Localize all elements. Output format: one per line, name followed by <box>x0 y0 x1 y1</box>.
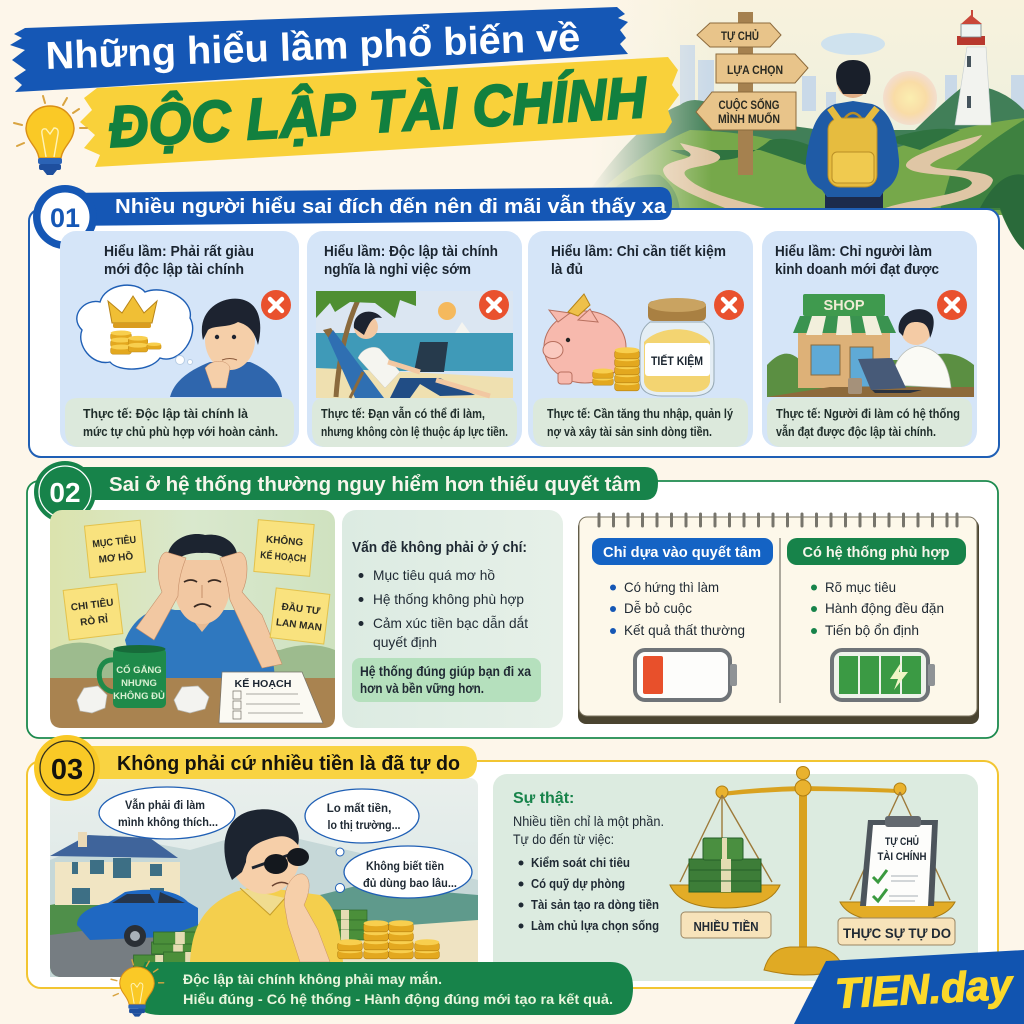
truth panel: Sự thật: <box>513 790 574 807</box>
card 3: Hiểu lầm: Chỉ cần tiết kiệm <box>551 244 726 260</box>
label: thuc su tu do <box>838 918 955 945</box>
problem text panel: Vấn đề không phải ở ý chí: <box>352 540 527 556</box>
truth panel: Có quỹ dự phòng <box>531 877 625 891</box>
title <box>10 7 679 167</box>
left pan with money <box>670 838 780 908</box>
truth panel: Làm chủ lựa chọn sống <box>531 919 659 933</box>
signpost <box>696 12 808 175</box>
right pan with clipboard <box>840 816 955 922</box>
crumpled papers <box>77 686 209 713</box>
card 4: vẫn đạt được độc lập tài chính. <box>776 424 936 439</box>
right column: system: Có hệ thống phù hợp <box>802 544 950 561</box>
section 3 header: 03 <box>51 754 83 786</box>
problem text panel: Hệ thống không phù hợp <box>373 591 524 607</box>
title line 2 banner: ĐỘC LẬP TÀI CHÍNH <box>107 65 649 160</box>
sticky note: muc tieu <box>84 520 146 578</box>
sticky note: chi tieu <box>63 584 123 640</box>
left column: determination <box>592 538 773 700</box>
section 1 header: 01 <box>50 203 80 233</box>
card 1 <box>60 231 299 447</box>
section 2 header: 02 <box>49 477 81 508</box>
truth panel: Nhiều tiền chỉ là một phần. <box>513 814 664 829</box>
header landscape illustration <box>575 0 1024 250</box>
title line 1 banner: Những hiểu lầm phổ biến về <box>45 16 581 78</box>
icon: low battery <box>635 650 737 700</box>
speech bubble 3: Không biết tiền <box>366 861 444 873</box>
sticky note: chi tieu: CHI TIÊU <box>70 595 114 614</box>
plan paper: KẾ HOẠCH <box>234 677 292 690</box>
left column: determination: Dễ bỏ cuộc <box>624 600 692 616</box>
shop and man with laptop: SHOP <box>823 298 865 314</box>
card 2: nhưng không còn lệ thuộc áp lực tiền. <box>321 424 508 439</box>
label: nhieu tien: NHIỀU TIỀN <box>694 919 758 934</box>
card 4 <box>762 231 977 447</box>
piggy bank and coins <box>543 294 639 391</box>
logo: TIEN.day <box>794 950 1024 1024</box>
rich man illustration <box>50 778 478 977</box>
stressed man illustration <box>50 510 335 728</box>
notebook comparison <box>578 514 979 724</box>
thinking man <box>170 299 282 397</box>
card 1: Thực tế: Độc lập tài chính là <box>83 406 249 421</box>
speech bubble 2: lo thị trường... <box>328 820 400 832</box>
card 3: Thực tế: Cần tăng thu nhập, quản lý <box>547 406 734 421</box>
column divider <box>779 538 781 703</box>
conclusion banner: Hiểu đúng - Có hệ thống - Hành động đúng mới tạo ra kết quả. <box>183 991 613 1007</box>
blue car <box>77 890 198 947</box>
savings jar <box>640 298 714 396</box>
speech bubble 3 <box>336 846 472 898</box>
title line 1 banner <box>10 7 628 92</box>
right column: system: Rõ mục tiêu <box>825 579 896 595</box>
section 3 header: Không phải cứ nhiều tiền là đã tự do <box>117 752 460 775</box>
problem text panel: Cảm xúc tiền bạc dẫn dắt <box>373 615 528 631</box>
card 1: mức tự chủ phù hợp với hoàn cảnh. <box>83 424 278 439</box>
card 3: nợ và xây tài sản sinh dòng tiền. <box>547 424 712 439</box>
sticky note: khong ke hoach: KHÔNG <box>266 532 304 549</box>
signpost: MÌNH MUỐN <box>718 112 780 126</box>
house <box>50 832 180 905</box>
panel: section 2 <box>27 461 1024 1024</box>
right pan with clipboard: TỰ CHỦ <box>885 835 919 848</box>
coffee mug <box>99 645 166 708</box>
problem text panel: quyết định <box>373 634 437 650</box>
speech bubble 2 <box>305 789 419 843</box>
section 3 header <box>34 735 477 801</box>
card 3 <box>528 231 753 447</box>
section 1 header: Nhiều người hiểu sai đích đến nên đi mãi vẫn thấy xa <box>115 194 667 218</box>
conclusion banner <box>111 960 633 1017</box>
panel: section 1 <box>29 185 999 457</box>
right column: system: Tiến bộ ổn định <box>825 622 919 638</box>
signpost: TỰ CHỦ <box>721 28 759 43</box>
man with sunglasses <box>190 809 343 962</box>
signpost: CUỘC SỐNG <box>718 98 780 112</box>
thought cloud with crown and coins <box>77 285 193 369</box>
speech bubble 1 <box>99 787 235 839</box>
plan paper <box>219 672 323 723</box>
card 2: nghĩa là nghỉ việc sớm <box>324 262 471 278</box>
card 1: mới độc lập tài chính <box>104 262 244 278</box>
sticky note: muc tieu: MƠ HỒ <box>98 549 134 566</box>
sticky note: chi tieu: RÒ RỈ <box>79 612 109 629</box>
problem text panel: Mục tiêu quá mơ hồ <box>373 567 495 583</box>
key takeaway box <box>352 658 541 702</box>
truth panel <box>493 766 978 981</box>
lighthouse <box>955 10 991 125</box>
logo: TIEN.day: TIEN.day <box>834 961 1016 1017</box>
right pan with clipboard: TÀI CHÍNH <box>878 850 927 863</box>
speech bubble 3: đủ dùng bao lâu... <box>363 878 457 890</box>
card 4: kinh doanh mới đạt được <box>775 262 939 278</box>
sticky note: khong ke hoach: KẾ HOẠCH <box>260 548 307 565</box>
gold coin stacks <box>338 920 439 959</box>
savings jar: TIẾT KIỆM <box>651 353 703 368</box>
money stack <box>134 910 367 967</box>
man with backpack <box>806 60 899 210</box>
section 2 header <box>34 461 658 523</box>
left column: determination: Kết quả thất thường <box>624 622 745 638</box>
sticky note: dau tu: ĐẦU TƯ <box>281 600 322 617</box>
left arm holding head <box>136 552 186 640</box>
card 2 <box>307 231 522 447</box>
right column: system: Hành động đều đặn <box>825 600 944 616</box>
card 2: Thực tế: Đạn vẫn có thể đi làm, <box>321 406 485 421</box>
coffee mug: CỐ GẮNG <box>116 664 162 676</box>
icon: small bulb <box>111 960 164 1017</box>
card 1: Hiểu lầm: Phải rất giàu <box>104 244 254 260</box>
icon: full battery <box>832 650 935 700</box>
coffee mug: NHƯNG <box>121 678 157 689</box>
section 1 header <box>33 185 672 249</box>
problem text panel <box>342 510 563 728</box>
signpost: LỰA CHỌN <box>727 63 783 77</box>
label: thuc su tu do: THỰC SỰ TỰ DO <box>843 925 951 941</box>
sticky note: khong ke hoach <box>254 520 314 576</box>
beach illustration <box>316 291 513 398</box>
balance scale <box>670 766 955 975</box>
card 4: Hiểu lầm: Chỉ người làm <box>775 244 932 260</box>
left column: determination: Có hứng thì làm <box>624 579 719 595</box>
icon: light bulb <box>14 96 87 175</box>
label: nhieu tien <box>681 912 771 938</box>
card 2: Hiểu lầm: Độc lập tài chính <box>324 244 498 260</box>
sticky note: muc tieu: MỤC TIÊU <box>92 533 137 550</box>
coffee mug: KHÔNG ĐỦ <box>113 690 165 702</box>
shop and man with laptop <box>767 294 974 397</box>
key takeaway box: hơn và bền vững hơn. <box>360 681 484 696</box>
speech bubble 1: Vẫn phải đi làm <box>125 799 205 812</box>
truth panel: Tự do đến từ việc: <box>513 832 614 847</box>
right column: system <box>787 538 966 700</box>
key takeaway box: Hệ thống đúng giúp bạn đi xa <box>360 664 531 679</box>
speech bubble 1: mình không thích... <box>118 817 218 829</box>
left column: determination: Chỉ dựa vào quyết tâm <box>603 544 761 561</box>
card 4: Thực tế: Người đi làm có hệ thống <box>776 406 960 421</box>
section 2 header: Sai ở hệ thống thường nguy hiểm hơn thiếu quyết tâm <box>109 474 641 496</box>
truth panel: Kiểm soát chi tiêu <box>531 856 630 870</box>
sticky note: dau tu: LAN MAN <box>275 617 322 634</box>
sticky note: dau tu <box>270 588 330 644</box>
truth panel: Tài sản tạo ra dòng tiền <box>531 898 659 912</box>
card 3: là đủ <box>551 262 583 278</box>
right arm holding head <box>220 552 282 668</box>
conclusion banner: Độc lập tài chính không phải may mắn. <box>183 970 442 987</box>
spiral binding <box>599 514 957 526</box>
panel: section 3 <box>27 735 998 988</box>
speech bubble 2: Lo mất tiền, <box>327 803 391 815</box>
